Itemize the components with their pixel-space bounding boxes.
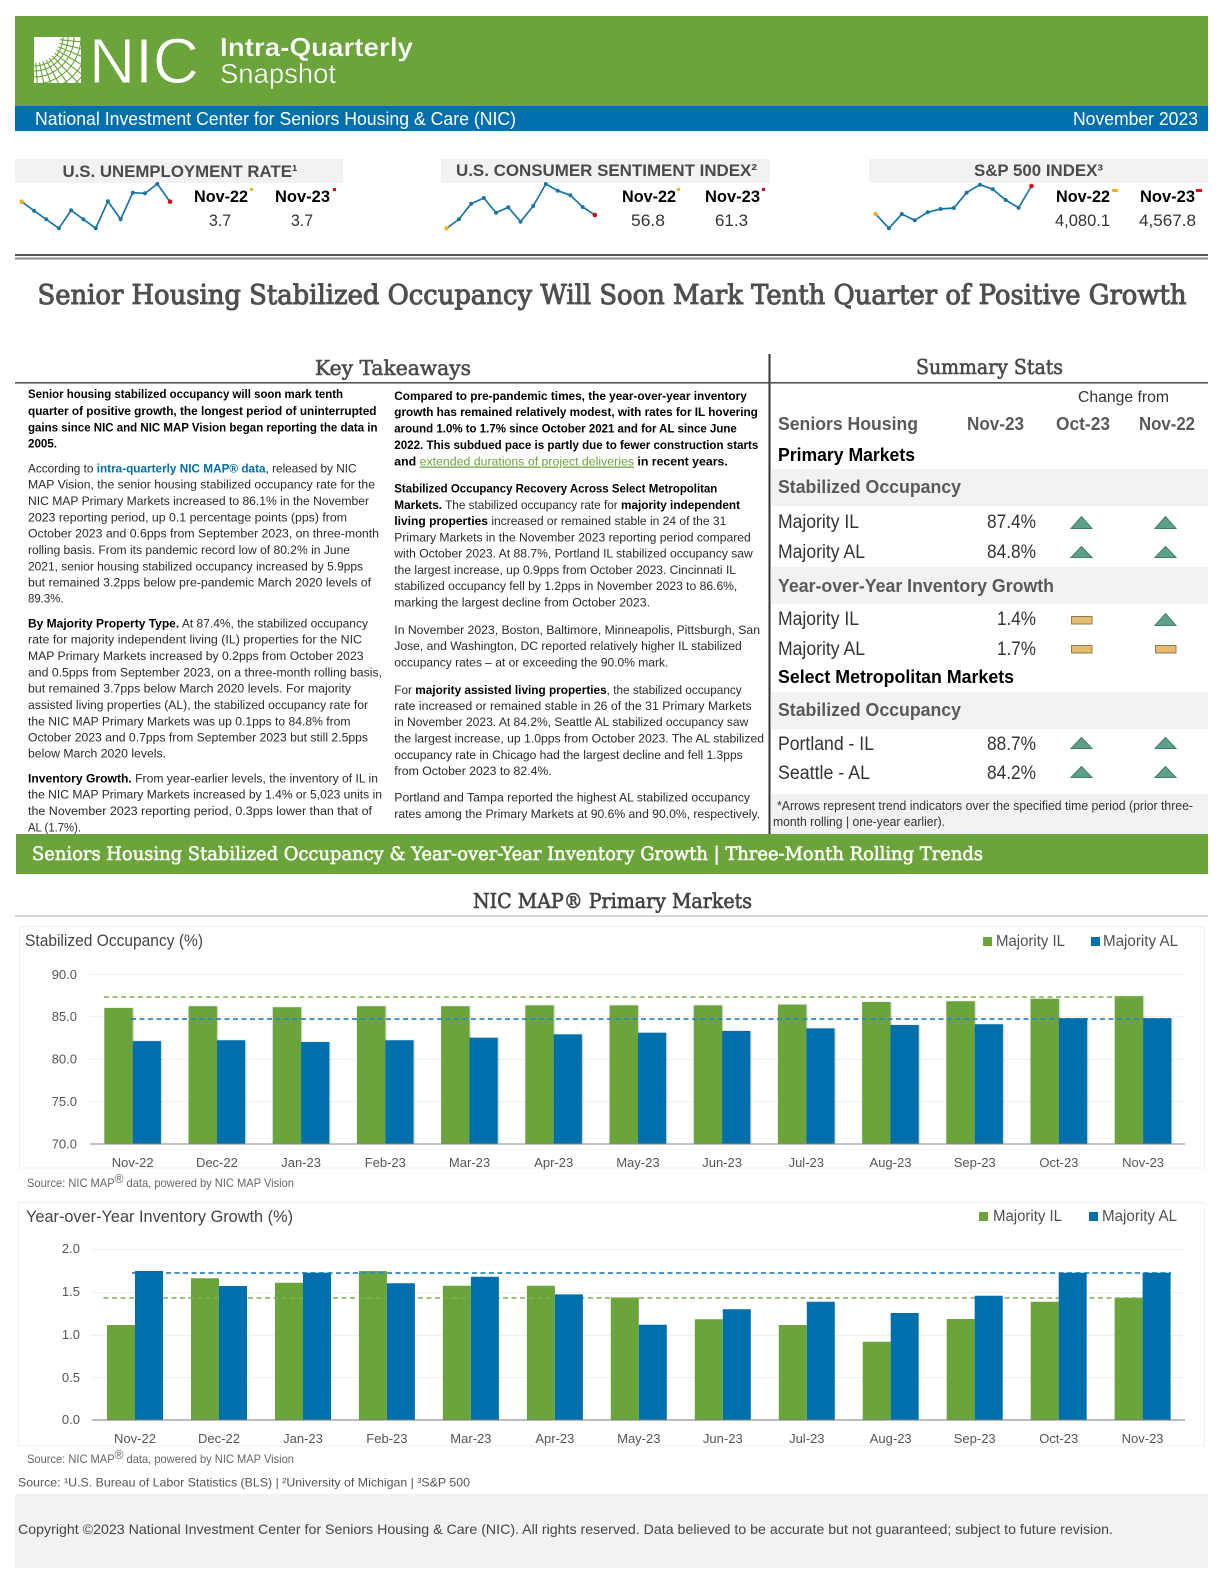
band: metro stabilized occupancy: Stabilized Occupancy bbox=[778, 700, 961, 720]
blue organisation bar bbox=[15, 106, 1208, 131]
band: inventory growth bbox=[771, 567, 1208, 604]
y axis: 1.5 bbox=[62, 1284, 80, 1299]
x axis labels: Feb-23 bbox=[365, 1155, 406, 1170]
x axis labels: Sep-23 bbox=[954, 1155, 996, 1170]
key takeaways: column one bbox=[28, 387, 382, 834]
y axis: 0.0 bbox=[62, 1412, 80, 1427]
row: Seattle AL bbox=[778, 763, 1176, 784]
table header: Nov-22 bbox=[1139, 414, 1195, 434]
table header: Nov-23 bbox=[967, 414, 1024, 434]
y axis bbox=[52, 967, 1185, 1152]
paragraph: inventory context: Compared to pre-pandemic times, the year-over-year inventory bbox=[394, 389, 747, 403]
dashed reference line: majority AL bbox=[131, 1018, 1171, 1020]
paragraph: assisted living: For majority assisted living properties, the stabilized occupancy bbox=[394, 683, 742, 697]
KPI: unemployment rate: 3.7 bbox=[209, 211, 231, 230]
KPI: S&P 500 bbox=[869, 159, 1208, 230]
header banner bbox=[15, 16, 1208, 106]
table header: Oct-23 bbox=[1056, 414, 1110, 434]
KPI: consumer sentiment: 56.8 bbox=[631, 211, 665, 230]
x axis labels: Jul-23 bbox=[789, 1431, 825, 1446]
row: majority IL occupancy: Majority IL bbox=[778, 512, 859, 533]
paragraph: metropolitan recovery: Markets. The stabilized occupancy rate for majority independent bbox=[394, 498, 740, 512]
row: majority IL occupancy: 87.4% bbox=[987, 512, 1036, 533]
paragraph: by majority property type: below March 2020 levels. bbox=[28, 746, 166, 760]
section: select metropolitan markets: Select Metropolitan Markets bbox=[778, 667, 1014, 687]
paragraph: overview bbox=[28, 462, 379, 606]
x axis labels: Jun-23 bbox=[703, 1431, 743, 1446]
paragraph: by majority property type: MAP Primary Markets increased by 0.2pps from October 2023 bbox=[28, 649, 364, 663]
chart source: inventory: data, powered by NIC MAP Vision bbox=[123, 1452, 294, 1466]
key takeaways: column two bbox=[393, 389, 764, 821]
KPI: S&P 500: S&P 500 INDEX³ bbox=[974, 161, 1103, 180]
chart source: occupancy: Source: NIC MAP bbox=[27, 1176, 122, 1190]
KPI: consumer sentiment bbox=[441, 159, 770, 231]
bar chart: stabilized occupancy bbox=[20, 926, 1204, 1170]
KPI: unemployment rate: Nov-22 bbox=[194, 188, 248, 206]
paragraph: overview: MAP Vision, the senior housing stabilized occupancy rate for the bbox=[28, 478, 375, 492]
paragraph: by majority property type: assisted living properties (AL), the stabilized occupancy rate for bbox=[28, 698, 368, 712]
table footnote: *Arrows represent trend indicators over the specified time period (prior three- bbox=[777, 799, 1193, 813]
series: majority AL bbox=[133, 1018, 1171, 1144]
paragraph: assisted living bbox=[394, 683, 764, 778]
paragraph: overview: NIC MAP Primary Markets increased to 86.1% in the November bbox=[28, 494, 369, 508]
y axis bbox=[62, 1241, 1185, 1427]
row: majority AL occupancy: 84.8% bbox=[987, 542, 1036, 563]
paragraph: top IL markets bbox=[394, 623, 760, 670]
x axis labels: Aug-23 bbox=[870, 1431, 912, 1446]
chart source: inventory: ® bbox=[115, 1447, 124, 1462]
row: majority AL inventory: 1.7% bbox=[997, 639, 1036, 660]
y axis: 1.0 bbox=[62, 1327, 80, 1342]
chart title: Stabilized Occupancy (%) bbox=[25, 932, 203, 950]
KPI: S&P 500: Nov-22 bbox=[1056, 188, 1110, 206]
series: majority IL bbox=[104, 996, 1143, 1144]
table footnote: month rolling | one-year earlier). bbox=[773, 815, 945, 829]
paragraph: overview: 2021, senior housing stabilized occupancy increased by 5.9pps bbox=[28, 560, 363, 574]
paragraph: by majority property type: By Majority Property Type. At 87.4%, the stabilized occupancy bbox=[28, 616, 369, 630]
row: Seattle AL: Seattle - AL bbox=[778, 763, 870, 784]
table header bbox=[778, 389, 1195, 434]
page sources: Source: ¹U.S. Bureau of Labor Statistics (BLS) | ²University of Michigan | ³S&P 500 bbox=[18, 1476, 470, 1490]
section banner: trends bbox=[16, 834, 1208, 874]
KPI: unemployment rate: U.S. UNEMPLOYMENT RATE¹ bbox=[62, 162, 298, 181]
chart source: occupancy: data, powered by NIC MAP Vision bbox=[123, 1176, 294, 1190]
x axis labels: Jul-23 bbox=[789, 1155, 824, 1170]
x axis labels bbox=[112, 1155, 1164, 1170]
paragraph: assisted living: the largest increase, up 1.0pps from October 2023. The AL stabilized bbox=[394, 732, 764, 746]
product subtitle: Snapshot bbox=[220, 58, 336, 89]
band: metro stabilized occupancy bbox=[771, 692, 1208, 729]
paragraph: inventory growth: AL (1.7%). bbox=[28, 820, 81, 834]
x axis labels: Apr-23 bbox=[534, 1155, 573, 1170]
section: primary markets: Primary Markets bbox=[778, 445, 915, 465]
row: majority IL occupancy bbox=[778, 512, 1176, 533]
band: stabilized occupancy: Stabilized Occupancy bbox=[778, 477, 961, 497]
y axis: 85.0 bbox=[52, 1009, 77, 1024]
paragraph: metropolitan recovery bbox=[393, 482, 753, 610]
x axis labels: Nov-22 bbox=[114, 1431, 156, 1446]
row: majority AL inventory: Majority AL bbox=[778, 639, 865, 660]
paragraph: overview: According to intra-quarterly NIC MAP® data, released by NIC bbox=[28, 462, 357, 476]
product name: Intra-Quarterly bbox=[220, 32, 414, 62]
x axis labels: Feb-23 bbox=[366, 1431, 408, 1446]
paragraph: top AL markets: rates among the Primary Markets at 90.6% and 90.0%, respectively. bbox=[394, 807, 760, 821]
table footnote bbox=[771, 794, 1208, 834]
y axis: 70.0 bbox=[52, 1136, 77, 1152]
sparkline bbox=[873, 183, 1034, 230]
section banner: trends: Seniors Housing Stabilized Occupancy & Year-over-Year Inventory Growth | Three-Month Rolling Trends bbox=[32, 844, 983, 865]
x axis labels: Sep-23 bbox=[954, 1431, 996, 1446]
legend: Majority AL bbox=[1102, 1208, 1177, 1225]
x axis labels: Dec-22 bbox=[198, 1431, 240, 1446]
blue organisation bar: November 2023 bbox=[1073, 109, 1198, 129]
paragraph: overview: October 2023 and 0.6pps from September 2023, on three-month bbox=[28, 526, 379, 540]
KPI: S&P 500: Nov-23 bbox=[1140, 188, 1195, 206]
paragraph: metropolitan recovery: living properties increased or remained stable in 24 of the 31 bbox=[394, 514, 726, 528]
row: majority IL inventory: Majority IL bbox=[778, 609, 859, 630]
paragraph: by majority property type: the NIC MAP Primary Markets was up 0.1pps to 84.8% from bbox=[28, 714, 350, 728]
row: majority IL inventory bbox=[778, 609, 1176, 630]
KPI: unemployment rate: Nov-23 bbox=[275, 188, 330, 206]
x axis labels: Mar-23 bbox=[450, 1431, 491, 1446]
paragraph: overview: 2023 reporting period, up 0.1 percentage points (pps) from bbox=[28, 510, 347, 524]
paragraph: metropolitan recovery: Stabilized Occupancy Recovery Across Select Metropolitan bbox=[394, 482, 717, 496]
sparkline bbox=[19, 182, 172, 230]
x axis labels: Dec-22 bbox=[196, 1155, 238, 1170]
paragraph: lead: 2005. bbox=[28, 436, 57, 450]
row: majority AL occupancy bbox=[778, 542, 1176, 563]
paragraph: inventory context: 2022. This subdued pace is partly due to fewer construction starts bbox=[394, 438, 758, 452]
x axis labels: Nov-23 bbox=[1122, 1431, 1164, 1446]
KPI: consumer sentiment: 61.3 bbox=[715, 211, 748, 230]
series: majority AL bbox=[135, 1271, 1171, 1420]
paragraph: assisted living: occupancy rate in Chicago had the largest decline and fell 1.3pps bbox=[394, 748, 743, 762]
paragraph: by majority property type: but remained 3.7pps below March 2020 levels. For majority bbox=[28, 682, 352, 696]
paragraph: metropolitan recovery: stabilized occupancy fell by 1.2pps in November 2023 to 86.6%, bbox=[394, 579, 737, 593]
y axis: 80.0 bbox=[52, 1052, 77, 1066]
footer: copyright bbox=[15, 1494, 1208, 1568]
x axis labels: Nov-22 bbox=[112, 1155, 154, 1170]
y axis: 0.5 bbox=[62, 1370, 80, 1385]
bar chart: inventory growth bbox=[18, 1202, 1204, 1446]
KPI: unemployment rate: 3.7 bbox=[291, 211, 313, 230]
x axis labels bbox=[114, 1431, 1164, 1446]
y axis: 90.0 bbox=[52, 967, 77, 982]
x axis labels: Jun-23 bbox=[702, 1155, 742, 1170]
x axis labels: Aug-23 bbox=[870, 1155, 911, 1170]
paragraph: lead: quarter of positive growth, the longest period of uninterrupted bbox=[28, 404, 376, 418]
KPI: consumer sentiment: U.S. CONSUMER SENTIMENT INDEX² bbox=[456, 161, 757, 180]
paragraph: overview: 89.3%. bbox=[28, 592, 64, 606]
x axis labels: Jan-23 bbox=[281, 1155, 321, 1170]
paragraph: lead bbox=[28, 387, 378, 450]
row: majority AL inventory bbox=[778, 639, 1176, 660]
paragraph: metropolitan recovery: Primary Markets in the November 2023 reporting period compared bbox=[394, 530, 751, 544]
table header: Seniors Housing bbox=[778, 414, 918, 434]
row: majority AL occupancy: Majority AL bbox=[778, 542, 865, 563]
table header: Change from bbox=[1078, 389, 1169, 406]
summary stats heading: Summary Stats bbox=[916, 355, 1063, 379]
paragraph: metropolitan recovery: the largest increase, up 0.9pps from October 2023. Cincinnati IL bbox=[394, 563, 736, 577]
x axis labels: May-23 bbox=[617, 1431, 660, 1446]
KPI: S&P 500: 4,080.1 bbox=[1055, 211, 1110, 230]
row: majority IL inventory: 1.4% bbox=[997, 609, 1036, 630]
paragraph: by majority property type: October 2023 and 0.7pps from September 2023 but still 2.5pps bbox=[28, 730, 368, 744]
x axis labels: Apr-23 bbox=[535, 1431, 574, 1446]
KPI: consumer sentiment: Nov-22 bbox=[622, 188, 676, 206]
band: stabilized occupancy bbox=[771, 469, 1208, 506]
KPI: consumer sentiment: Nov-23 bbox=[705, 188, 760, 206]
x axis labels: Oct-23 bbox=[1039, 1155, 1078, 1170]
paragraph: by majority property type bbox=[28, 616, 382, 760]
paragraph: inventory context: and extended durations of project deliveries in recent years. bbox=[394, 454, 728, 468]
paragraph: assisted living: in November 2023. At 84.2%, Seattle AL stabilized occupancy saw bbox=[394, 715, 748, 729]
band: inventory growth: Year-over-Year Inventory Growth bbox=[778, 576, 1054, 596]
x axis labels: Mar-23 bbox=[449, 1155, 490, 1170]
paragraph: overview: but remained 3.2pps below pre-pandemic March 2020 levels of bbox=[28, 576, 372, 590]
paragraph: inventory growth: Inventory Growth. From year-earlier levels, the inventory of IL in bbox=[28, 772, 378, 786]
blue organisation bar: National Investment Center for Seniors Housing & Care (NIC) bbox=[35, 109, 516, 129]
paragraph: top IL markets: Jose, and Washington, DC reported relatively higher IL stabilized bbox=[394, 639, 742, 653]
legend: Majority IL bbox=[993, 1208, 1062, 1225]
paragraph: by majority property type: rate for majority independent living (IL) properties for the NIC bbox=[28, 632, 362, 646]
charts subheading: NIC MAP® Primary Markets bbox=[473, 889, 752, 913]
legend bbox=[983, 933, 1178, 950]
series: majority IL bbox=[107, 1271, 1143, 1420]
legend: Majority AL bbox=[1103, 933, 1178, 950]
paragraph: inventory context bbox=[394, 389, 758, 468]
x axis labels: Oct-23 bbox=[1039, 1431, 1078, 1446]
paragraph: top IL markets: occupancy rates – at or exceeding the 90.0% mark. bbox=[394, 656, 668, 670]
y axis: 75.0 bbox=[52, 1094, 77, 1109]
paragraph: metropolitan recovery: with October 2023. At 88.7%, Portland IL stabilized occupancy saw bbox=[393, 546, 753, 560]
x axis labels: Nov-23 bbox=[1122, 1155, 1164, 1170]
chart source: inventory: Source: NIC MAP bbox=[27, 1452, 122, 1466]
row: Seattle AL: 84.2% bbox=[987, 763, 1036, 784]
legend: Majority IL bbox=[996, 933, 1065, 950]
paragraph: lead: gains since NIC and NIC MAP Vision began reporting the data in bbox=[28, 420, 378, 434]
paragraph: metropolitan recovery: marking the largest decline from October 2023. bbox=[394, 596, 650, 610]
chart source: occupancy: ® bbox=[115, 1171, 124, 1186]
paragraph: inventory growth: the November 2023 reporting period, 0.3pps lower than that of bbox=[28, 804, 373, 818]
legend bbox=[979, 1208, 1177, 1225]
panel: summary stats bbox=[769, 355, 1208, 834]
row: Portland IL: 88.7% bbox=[987, 734, 1036, 755]
paragraph: inventory context: around 1.0% to 1.7% since October 2021 and for AL since June bbox=[394, 422, 737, 436]
y axis: 2.0 bbox=[62, 1241, 80, 1256]
KPI: unemployment rate bbox=[15, 159, 343, 230]
paragraph: assisted living: rate increased or remained stable in 26 of the 31 Primary Markets bbox=[394, 699, 752, 713]
paragraph: inventory growth bbox=[28, 772, 382, 834]
chart title: Year-over-Year Inventory Growth (%) bbox=[26, 1208, 293, 1226]
paragraph: top AL markets bbox=[394, 790, 760, 821]
row: Portland IL: Portland - IL bbox=[778, 734, 874, 755]
paragraph: overview: rolling basis. From its pandemic record low of 80.2% in June bbox=[28, 543, 350, 557]
x axis labels: May-23 bbox=[616, 1155, 660, 1170]
logo wordmark: NIC bbox=[89, 25, 199, 97]
paragraph: lead: Senior housing stabilized occupancy will soon mark tenth bbox=[28, 387, 343, 401]
dashed reference line: majority AL bbox=[132, 1272, 1171, 1274]
footer: copyright: Copyright ©2023 National Investment Center for Seniors Housing & Care (NIC). All rights reserved. Data believed to be accurate but not guaranteed; subject to future revision. bbox=[18, 1521, 1113, 1537]
row: Portland IL bbox=[778, 734, 1176, 755]
paragraph: by majority property type: and 0.5pps from September 2023, on a three-month rolling basis, bbox=[28, 666, 382, 680]
paragraph: inventory growth: the NIC MAP Primary Markets increased by 1.4% or 5,023 units in bbox=[28, 788, 382, 802]
paragraph: inventory context: growth has remained relatively modest, with rates for IL hovering bbox=[394, 405, 758, 419]
paragraph: top AL markets: Portland and Tampa reported the highest AL stabilized occupancy bbox=[394, 790, 751, 804]
sparkline bbox=[444, 182, 597, 231]
paragraph: assisted living: from October 2023 to 82.4%. bbox=[394, 764, 552, 778]
key takeaways heading: Key Takeaways bbox=[315, 356, 471, 380]
paragraph: top IL markets: In November 2023, Boston, Baltimore, Minneapolis, Pittsburgh, San bbox=[394, 623, 760, 637]
KPI: S&P 500: 4,567.8 bbox=[1139, 211, 1196, 230]
logo mark: fan lattice bbox=[34, 37, 81, 83]
dashed reference line: majority IL bbox=[104, 1297, 1143, 1299]
dashed reference line: majority IL bbox=[104, 996, 1143, 998]
x axis labels: Jan-23 bbox=[283, 1431, 323, 1446]
